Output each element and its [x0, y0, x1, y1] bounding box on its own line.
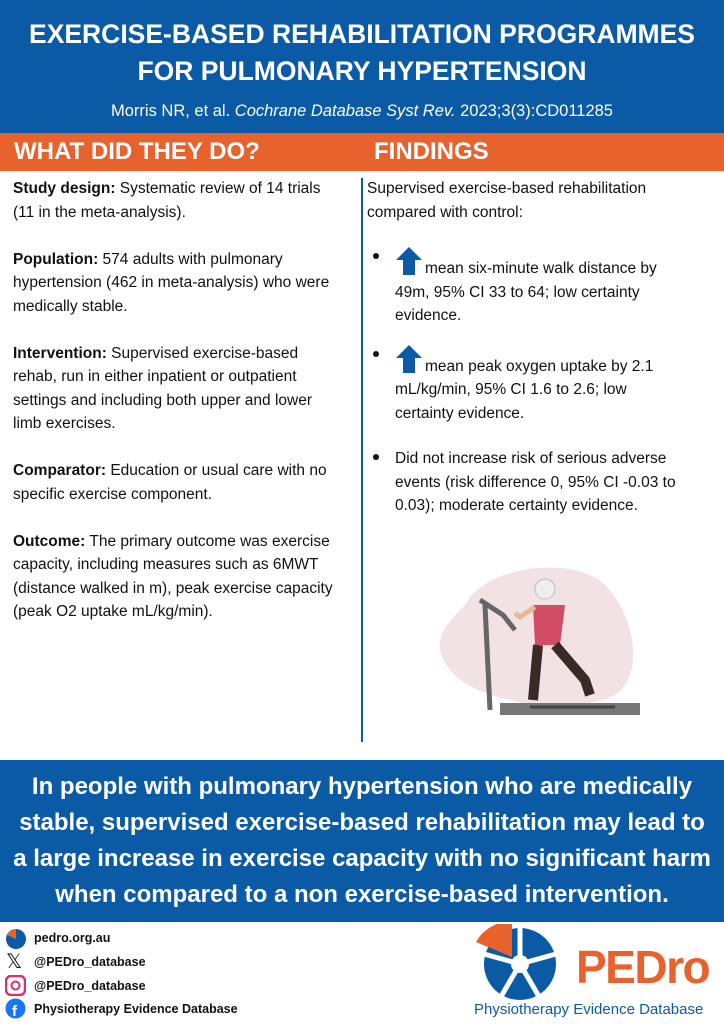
title: FOR PULMONARY HYPERTENSION — [137, 56, 587, 86]
section headings bar: FINDINGS — [374, 138, 489, 165]
section headings bar: WHAT DID THEY DO? — [14, 138, 260, 165]
title: EXERCISE-BASED REHABILITATION PROGRAMMES — [29, 19, 695, 49]
panel: findings: Did not increase risk of serious adverse events (risk difference 0, 95% CI -0.03 to 0.03); moderate certainty evidence. — [395, 450, 676, 514]
icon: pedro — [6, 929, 26, 949]
footer contacts — [5, 929, 238, 1019]
section headings bar — [0, 133, 724, 171]
panel: what did they do: Comparator: Education or usual care with no specific exercise component. — [13, 462, 327, 502]
logo: PEDro: Physiotherapy Evidence Database — [474, 1001, 703, 1018]
logo: PEDro — [474, 924, 709, 1018]
panel: findings: mean six-minute walk distance by 49m, 95% CI 33 to 64; low certainty evidence. — [395, 260, 657, 324]
icon: instagram — [5, 975, 26, 996]
divider — [361, 178, 363, 742]
header — [0, 0, 724, 133]
panel: findings: mean peak oxygen uptake by 2.1 mL/kg/min, 95% CI 1.6 to 2.6; low certainty evidence. — [395, 358, 653, 422]
citation: Morris NR, et al. Cochrane Database Syst Rev. 2023;3(3):CD011285 — [111, 102, 613, 120]
panel: findings: Supervised exercise-based rehabilitation compared with control: — [367, 180, 646, 220]
logo: PEDro: PEDro — [576, 941, 709, 993]
panel: what did they do — [13, 180, 333, 620]
conclusion: In people with pulmonary hypertension who are medically stable, supervised exercise-based rehabilitation may lead to a large increase in exercise capacity with no significant harm when compared to a non exercise-based intervention. — [13, 773, 711, 908]
footer contacts: @PEDro_database — [34, 979, 146, 993]
footer contacts: pedro.org.au — [34, 931, 110, 945]
icon: X: 𝕏 — [6, 951, 22, 973]
title — [29, 19, 695, 86]
footer contacts: Physiotherapy Evidence Database — [34, 1002, 238, 1016]
panel: findings — [367, 180, 676, 514]
footer contacts: @PEDro_database — [34, 955, 146, 969]
panel: what did they do: Study design: Systematic review of 14 trials (11 in the meta-analysis). — [13, 180, 320, 220]
panel: what did they do: Intervention: Supervised exercise-based rehab, run in either inpatient or outpatient settings and including both upper and lower limb exercises. — [13, 344, 312, 432]
panel: what did they do: Outcome: The primary outcome was exercise capacity, including measures such as 6MWT (distance walked in m), peak exercise capacity (peak O2 uptake mL/kg/min). — [13, 532, 333, 620]
illustration: woman on treadmill — [440, 568, 640, 715]
panel: what did they do: Population: 574 adults with pulmonary hypertension (462 in meta-analysis) who were medically stable. — [13, 250, 329, 314]
icon: facebook — [6, 998, 26, 1019]
